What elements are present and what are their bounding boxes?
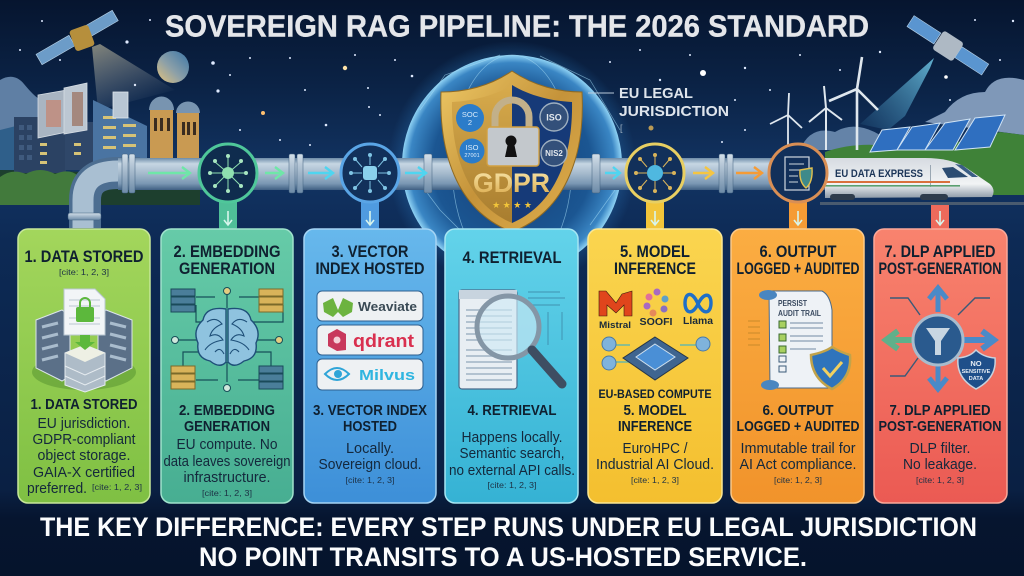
left scene: satellite, moon and city [0,10,200,205]
icon: audit trail scroll with shield [748,290,850,390]
panel: 5 model inference [588,229,722,503]
label: EU legal jurisdiction [588,85,729,133]
icon: padlock [487,100,539,166]
panel: 3 vector index hosted: 3. VECTOR [332,243,409,261]
key difference footer: THE KEY DIFFERENCE: EVERY STEP RUNS UNDER EU LEGAL JURISDICTION [40,512,977,542]
icon: GDPR shield [441,71,582,232]
seal: SOC 2: SOC [462,110,479,119]
panel: 2 embedding generation: 2. EMBEDDING [179,402,275,419]
icon: DLP filter with arrows [886,288,995,389]
panel: 3 vector index hosted: Sovereign cloud. [318,457,422,473]
panel: 6 output logged + audited: LOGGED + AUDITED [736,418,860,435]
icon: node circle, model inference [626,144,684,202]
icon: train EU data express [820,158,1024,205]
title: SOVEREIGN RAG PIPELINE: THE 2026 STANDARD [165,8,869,44]
panel: 4 retrieval: 4. RETRIEVAL [468,402,556,419]
icon: audit trail scroll with shield: PERSIST [778,298,808,308]
panel: 3 vector index hosted: 3. VECTOR INDEX [313,402,427,419]
icon: node circle, embedding [199,144,257,202]
panel: 4 retrieval: Semantic search, [460,446,564,462]
panel: 6 output logged + audited: 6. OUTPUT [762,402,834,419]
panel: 1 data stored: preferred. [27,481,87,497]
panel: 5 model inference: Industrial AI Cloud. [596,457,714,473]
panel: 1 data stored: object storage. [38,448,130,464]
panel: 5 model inference: INFERENCE [618,418,692,435]
logo button: Weaviate: Weaviate [358,300,417,314]
panel: 2 embedding generation: 2. EMBEDDING [174,243,280,261]
logo: Mistral: Mistral [599,320,631,330]
seal: ISO 27001 [460,138,484,164]
seal: SOC 2: 2 [468,118,472,127]
panel: 7 DLP applied post-generation [874,229,1007,503]
panel: 2 embedding generation: GENERATION [179,260,275,278]
key difference footer: NO POINT TRANSITS TO A US-HOSTED SERVICE. [199,542,807,572]
panel: 2 embedding generation [161,229,293,503]
panel: 5 model inference: INFERENCE [614,260,696,278]
panel: 7 DLP applied post-generation: 7. DLP APPLIED [884,243,996,261]
logo: SOOFI [640,288,673,328]
panel: 5 model inference: EU-BASED COMPUTE [598,389,712,401]
panel: 2 embedding generation: [cite: 1, 2, 3] [202,489,252,498]
seal: ISO: ISO [546,112,562,122]
logo button: qdrant [317,325,423,355]
icon: DLP filter with arrows: NO [970,359,982,368]
icon: audit trail scroll with shield: AUDIT TRAIL [778,309,821,318]
panel: 4 retrieval [445,229,578,503]
panel: 3 vector index hosted: [cite: 1, 2, 3] [346,476,394,485]
icon: EU compute chip [602,337,710,380]
panel: 2 embedding generation: data leaves sovereign [164,454,290,470]
panel: 1 data stored: [cite: 1, 2, 3] [92,483,142,492]
panel: 7 DLP applied post-generation: POST-GENERATION [878,418,1002,435]
logo button: Milvus: Milvus [359,367,415,384]
panel: 3 vector index hosted [304,229,436,503]
panel: 2 embedding generation: infrastructure. [184,470,270,486]
icon: servers with locked document [32,289,136,392]
panel: 3 vector index hosted: INDEX HOSTED [316,260,425,278]
icon: GDPR shield: GDPR [473,168,550,198]
seal: NIS2: NIS2 [545,149,563,158]
connector stems from pipeline to cards [219,200,949,238]
panel: 3 vector index hosted: Locally. [346,441,394,457]
logo: SOOFI: SOOFI [640,317,673,328]
panel: 1 data stored: 1. DATA STORED [30,396,138,413]
panel: 6 output logged + audited: Immutable trail for [740,441,856,457]
icon: DLP filter with arrows: SENSITIVE [962,369,991,375]
panel: 1 data stored: [cite: 1, 2, 3] [59,268,109,277]
seal: NIS2 [541,140,567,166]
icon: node circle, vector database [341,144,399,202]
globe: EU jurisdiction sphere [388,41,636,289]
icon: DLP filter with arrows: DATA [969,376,983,382]
panel: 1 data stored [18,229,150,503]
transit pipeline with arrows [68,154,838,228]
panel: 2 embedding generation: EU compute. No [176,437,278,453]
panel: 7 DLP applied post-generation: 7. DLP APPLIED [890,402,991,419]
seal: SOC 2 [456,104,484,132]
panel: 1 data stored: EU jurisdiction. [38,416,130,432]
logo: Llama [683,294,713,327]
panel: 1 data stored: GAIA-X certified [33,465,135,481]
panel: 6 output logged + audited: 6. OUTPUT [760,243,836,261]
label: EU legal jurisdiction: EU LEGAL [619,85,693,102]
panel: 4 retrieval: 4. RETRIEVAL [462,249,562,267]
panel: 4 retrieval: Happens locally. [462,430,562,446]
panel: 6 output logged + audited [731,229,864,503]
panel: 1 data stored: GDPR-compliant [32,432,136,448]
logo: Mistral [599,291,632,330]
panel: 6 output logged + audited: AI Act compliance. [740,457,856,473]
icon: brain with data nodes [171,288,283,392]
panel: 7 DLP applied post-generation: [cite: 1, 2, 3] [916,476,964,485]
panel: 5 model inference: [cite: 1, 2, 3] [631,476,679,485]
panel: 5 model inference: 5. MODEL [620,243,690,261]
logo: Llama: Llama [683,316,713,327]
key difference footer [40,512,977,572]
panel: 6 output logged + audited: [cite: 1, 2, 3] [774,476,822,485]
panel: 4 retrieval: no external API calls. [449,463,575,479]
label: EU legal jurisdiction: JURISDICTION [619,103,729,120]
seal: ISO 27001: 27001 [464,153,480,159]
seal: ISO 27001: ISO [466,143,479,152]
logo button: Milvus [317,359,423,390]
panel: 5 model inference: 5. MODEL [624,402,686,419]
icon: GDPR shield: ★ ★ ★ ★ [492,200,532,210]
icon: magnifier over document [459,290,565,389]
panel: 6 output logged + audited: LOGGED + AUDITED [736,260,860,278]
panel: 4 retrieval: [cite: 1, 2, 3] [488,481,536,490]
seal: ISO [540,103,568,131]
panel: 7 DLP applied post-generation: No leakage. [903,457,977,473]
panel: 1 data stored: 1. DATA STORED [24,248,144,266]
panel: 2 embedding generation: GENERATION [184,418,270,435]
right scene: satellite, turbines and solar panels [770,12,1024,195]
panel: 7 DLP applied post-generation: DLP filter. [910,441,970,457]
logo button: Weaviate [317,291,423,321]
label: EU legal jurisdiction: [ [620,123,623,133]
panel: 3 vector index hosted: HOSTED [343,418,397,435]
logo button: qdrant: qdrant [353,331,414,351]
icon: node circle, audit document [769,144,827,202]
icon: train EU data express: EU DATA EXPRESS [835,168,923,180]
panel: 5 model inference: EuroHPC / [622,441,688,457]
